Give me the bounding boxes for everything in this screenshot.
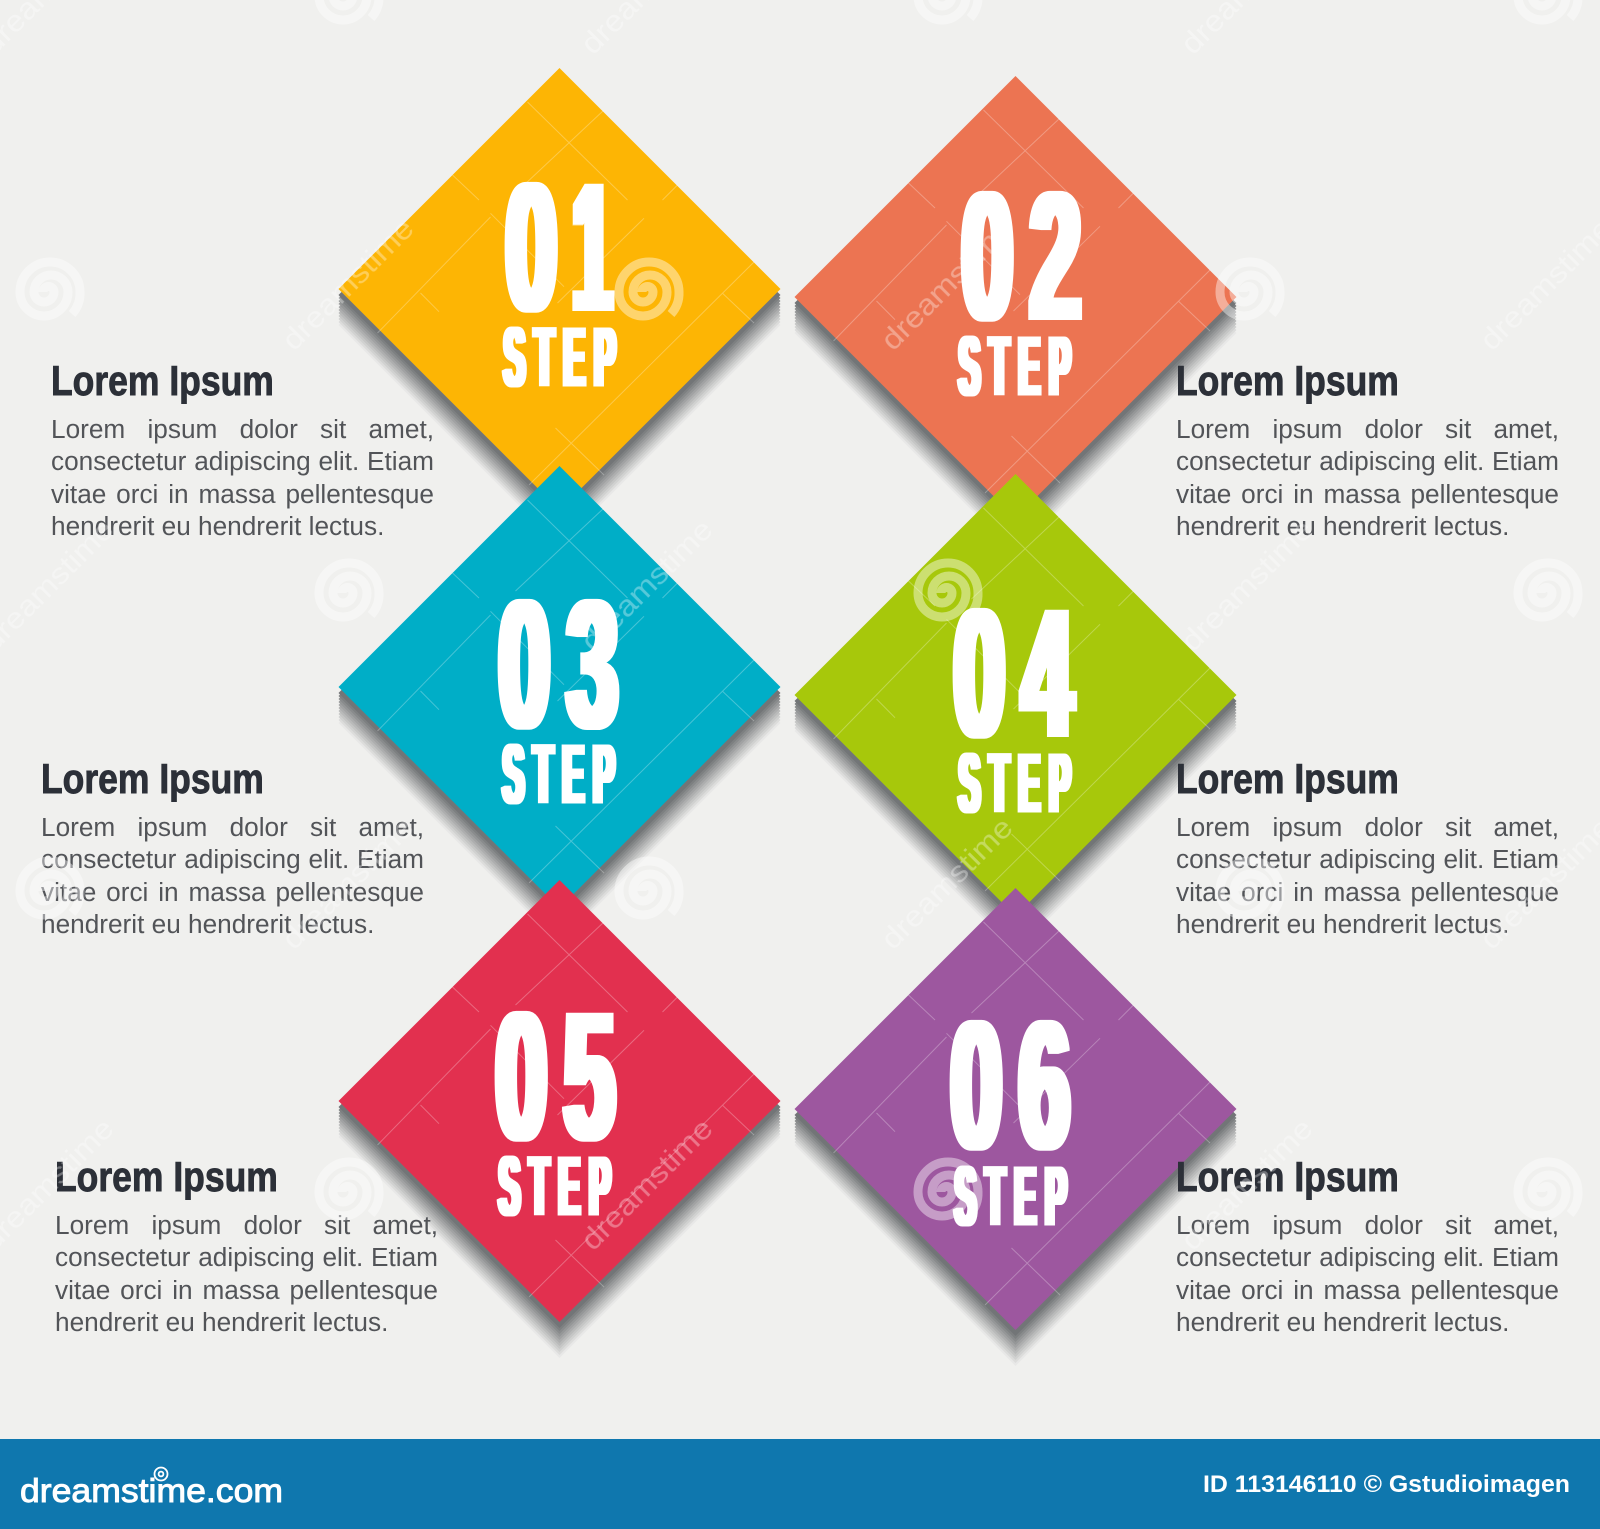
text block: step 02 description: vitae orci in massa pellentesque xyxy=(1176,479,1559,509)
step number 01 xyxy=(506,146,625,350)
step label: STEP xyxy=(959,737,1080,831)
text block: step 05 description xyxy=(55,1153,438,1337)
text block: step 02 description: consectetur adipiscing elit. Etiam xyxy=(1176,446,1559,476)
footer bar xyxy=(0,1439,1600,1529)
text block: step 06 description: hendrerit eu hendrerit lectus. xyxy=(1176,1307,1509,1337)
text block: step 06 description: Lorem ipsum dolor sit amet, xyxy=(1176,1210,1559,1240)
watermark overlay: dreamstime xyxy=(276,811,421,956)
panel: step 03 diamond xyxy=(338,466,780,944)
text block: step 05 description: hendrerit eu hendrerit lectus. xyxy=(55,1307,388,1337)
text block: step 04 description: vitae orci in massa pellentesque xyxy=(1176,877,1559,907)
text block: step 03 description: Lorem ipsum dolor sit amet, xyxy=(41,812,424,842)
text block: step 02 description: hendrerit eu hendrerit lectus. xyxy=(1176,511,1509,541)
text block: step 02 description xyxy=(1176,357,1559,541)
step label: STEP xyxy=(959,320,1080,414)
watermark overlay: dreamstime xyxy=(875,212,1020,357)
step number 04: 04 xyxy=(954,573,1090,775)
watermark overlay: dreamstime xyxy=(875,811,1020,956)
image id credit: ID 113146110 © Gstudioimagen xyxy=(1203,1471,1570,1498)
panel: step 04 diamond xyxy=(794,474,1236,952)
panel: step 05 diamond xyxy=(338,880,780,1358)
text block: step 01 description: hendrerit eu hendrerit lectus. xyxy=(51,511,384,541)
panel: step 01 diamond xyxy=(338,68,780,546)
step number 01: 0 xyxy=(506,147,574,349)
text block: step 06 description: Lorem Ipsum xyxy=(1176,1153,1399,1200)
text block: step 03 description: Lorem Ipsum xyxy=(41,755,264,802)
step label: STEP xyxy=(503,728,624,822)
text block: step 06 description: consectetur adipiscing elit. Etiam xyxy=(1176,1242,1559,1272)
text block: step 02 description: Lorem Ipsum xyxy=(1176,357,1399,404)
watermark overlay: dreamstime xyxy=(575,1112,720,1257)
text block: step 04 description: consectetur adipiscing elit. Etiam xyxy=(1176,844,1559,874)
icon: spiral xyxy=(154,1468,168,1480)
text block: step 03 description: vitae orci in massa pellentesque xyxy=(41,877,424,907)
text block: step 04 description: hendrerit eu hendrerit lectus. xyxy=(1176,909,1509,939)
text block: step 04 description xyxy=(1176,755,1559,939)
step label: STEP xyxy=(499,1140,620,1234)
watermark overlay: dreamstime xyxy=(575,513,720,658)
step label: STEP xyxy=(955,1150,1076,1244)
step number 05: 05 xyxy=(496,976,632,1178)
text block: step 01 description xyxy=(51,357,434,541)
step number 01: 1 xyxy=(573,146,625,350)
text block: step 05 description: consectetur adipiscing elit. Etiam xyxy=(55,1242,438,1272)
logo text: dreamstime.com xyxy=(20,1472,283,1509)
text block: step 04 description: Lorem Ipsum xyxy=(1176,755,1399,802)
text block: step 01 description: consectetur adipiscing elit. Etiam xyxy=(51,446,434,476)
text block: step 06 description xyxy=(1176,1153,1559,1337)
text block: step 02 description: Lorem ipsum dolor sit amet, xyxy=(1176,414,1559,444)
text block: step 05 description: Lorem ipsum dolor sit amet, xyxy=(55,1210,438,1240)
text block: step 01 description: Lorem Ipsum xyxy=(51,357,274,404)
text block: step 04 description: Lorem ipsum dolor sit amet, xyxy=(1176,812,1559,842)
watermark overlay: dreamstime xyxy=(1175,513,1320,658)
step number 06: 06 xyxy=(951,985,1087,1187)
step number 03: 03 xyxy=(499,564,635,766)
footer logo xyxy=(20,1468,283,1509)
text block: step 05 description: Lorem Ipsum xyxy=(55,1153,278,1200)
text block: step 01 description: vitae orci in massa pellentesque xyxy=(51,479,434,509)
text block: step 03 description: consectetur adipiscing elit. Etiam xyxy=(41,844,424,874)
panel: step 02 diamond xyxy=(794,76,1236,554)
text block: step 06 description: vitae orci in massa pellentesque xyxy=(1176,1275,1559,1305)
watermark overlay: dreamstime xyxy=(1175,1112,1320,1257)
text block: step 01 description: Lorem ipsum dolor sit amet, xyxy=(51,414,434,444)
step label: STEP xyxy=(504,311,625,405)
text block: step 03 description xyxy=(41,755,424,939)
text block: step 03 description: hendrerit eu hendrerit lectus. xyxy=(41,909,374,939)
text block: step 05 description: vitae orci in massa pellentesque xyxy=(55,1275,438,1305)
panel: step 06 diamond xyxy=(794,888,1236,1366)
watermark overlay: dreamstime xyxy=(276,212,421,357)
step number 02: 02 xyxy=(962,156,1098,358)
